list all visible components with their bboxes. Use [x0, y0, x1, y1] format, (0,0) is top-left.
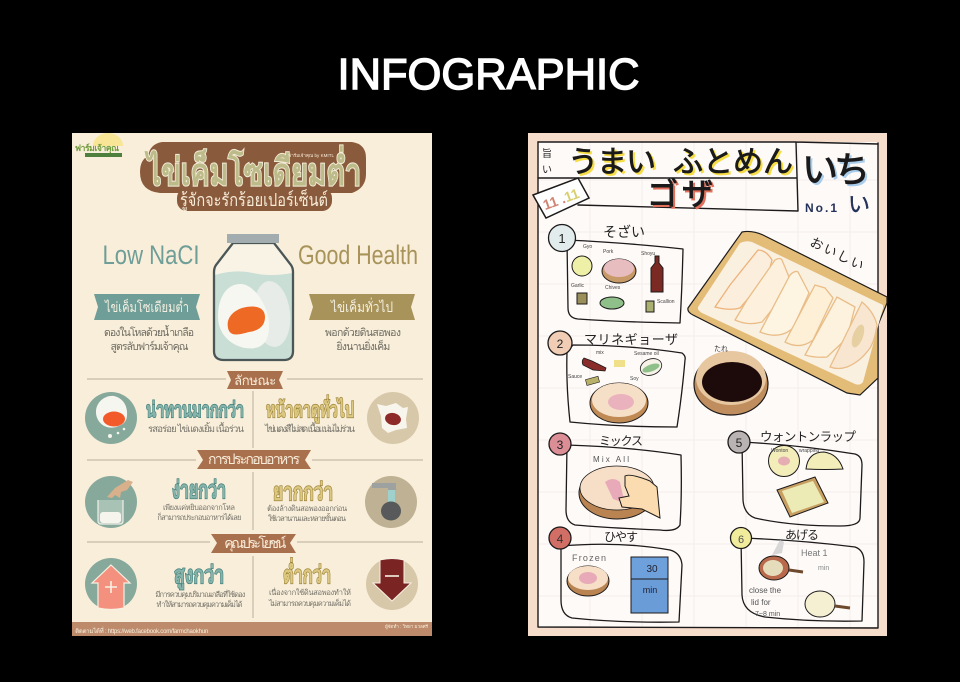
step 4 chill: 4	[557, 532, 564, 546]
text: lower: ไม่สามารถควบคุมความเค็มได้	[268, 598, 351, 608]
step 2 marinate: マリネギョーザ	[584, 329, 678, 348]
step 6 fry	[730, 526, 864, 621]
text: ordinary look: ไข่แดงสีไม่สด เนื้อแน่นไม่ร่วน	[264, 422, 356, 435]
step 6 fry: close the	[749, 586, 782, 595]
icon: tap and egg circle	[365, 476, 417, 528]
text: tastier	[146, 399, 244, 435]
logo	[75, 133, 123, 157]
step 6 fry: Heat 1	[801, 548, 828, 558]
label: delicious: おいしい	[807, 232, 868, 274]
recipe title: ふとめん	[675, 148, 795, 181]
footer bar: ผู้จัดทำ : วิทยา มวลศรี	[385, 623, 429, 630]
main title: INFOGRAPHIC	[338, 50, 640, 99]
section banner: cooking: การประกอบอาหาร	[208, 451, 300, 467]
recipe title: うまい	[570, 148, 658, 181]
step 1 ingredients: Chives	[605, 285, 621, 291]
sauce dish	[694, 344, 768, 415]
step 1 ingredients: Gyo	[583, 244, 592, 250]
panel: low sodium salted egg poster	[72, 133, 432, 636]
step 1 ingredients: Scallion	[657, 299, 675, 305]
step 1 ingredients	[548, 222, 683, 323]
step 2 marinate: mix	[596, 350, 604, 356]
ribbon: regular egg	[309, 294, 415, 320]
ribbon: low sodium egg	[94, 294, 200, 320]
step 3 mix	[549, 432, 681, 530]
step 5 wrap	[728, 426, 862, 526]
step 1 ingredients: そざい	[603, 222, 645, 242]
text: tastier: น่าทานมากกว่า	[146, 399, 244, 422]
text: low sodium description: ดองในโหลด้วยน้ำเกลือ	[104, 325, 194, 339]
poster title	[140, 142, 366, 211]
footer bar	[72, 622, 432, 636]
step 6 fry: 6	[738, 534, 744, 546]
gyoza dumplings	[715, 250, 877, 368]
text: regular description: พอกด้วยดินสอพอง	[325, 327, 401, 339]
heading: Low NaCl: Low NaCI	[102, 240, 200, 270]
poster title: รู้จักจะรักร้อยเปอร์เซ็นต์	[180, 188, 328, 211]
step 6 fry: lid for	[751, 598, 771, 607]
step 1 ingredients: Shoyu	[641, 251, 655, 257]
recipe title	[568, 146, 795, 181]
text: lower: ต่ำกว่า	[283, 557, 331, 589]
step 6 fry: 7~8 min	[755, 611, 780, 618]
logo: ฟาร์มเจ้าคุณ	[75, 143, 119, 154]
small label: tasty: 旨	[542, 145, 552, 160]
date tag	[533, 178, 589, 218]
jar with egg	[214, 234, 293, 360]
text: lower: เนื่องจากใช้ดินสอพองทำให้	[269, 587, 351, 597]
text: lower	[268, 557, 351, 608]
text: harder: ยากกว่า	[273, 479, 333, 506]
poster title: ฟาร์มเจ้าคุณ by KMITL	[288, 152, 334, 159]
text: easier	[157, 477, 241, 522]
step 4 chill: 30	[646, 564, 658, 575]
text: low sodium description: สูตรลับฟาร์มเจ้าคุณ	[110, 340, 189, 353]
ribbon: regular egg: ไข่เค็มทั่วไป	[330, 298, 393, 315]
icon: down arrow circle	[366, 558, 418, 610]
step 5 wrap: wrapping	[799, 448, 820, 454]
step 5 wrap: ウォントンラップ	[760, 426, 856, 445]
step 3 mix: ミックス	[599, 432, 643, 449]
step 2 marinate	[548, 329, 685, 427]
text: regular description: ยิ่งนานยิ่งเค็ม	[336, 339, 390, 353]
step 6 fry: min	[818, 565, 829, 572]
icon: dark yolk circle	[367, 392, 419, 444]
text: easier: ง่ายกว่า	[172, 477, 226, 504]
step 3 mix: 3	[557, 438, 564, 452]
step 4 chill: ひやす	[604, 528, 638, 545]
icon: egg yolk circle	[85, 392, 137, 444]
section banner: characteristics	[227, 371, 283, 389]
poster title: ไข่เค็มโซเดียมต่ำ	[144, 145, 361, 194]
rank text	[802, 149, 872, 217]
step 2 marinate: Sesame oil	[634, 351, 659, 357]
rank text: いち	[804, 151, 872, 192]
ribbon: low sodium egg: ไข่เค็มโซเดียมต่ำ	[104, 298, 189, 315]
section banner: cooking	[197, 450, 311, 469]
step 2 marinate: Sauce	[568, 374, 582, 380]
panel: gyoza recipe poster: い	[542, 161, 552, 176]
step 5 wrap: Wonton	[771, 448, 788, 454]
text: ordinary look: หน้าตาดูทั่วไป	[266, 394, 354, 424]
section banner: benefits: คุณประโยชน์	[224, 535, 287, 552]
text: harder	[267, 479, 347, 523]
step 1 ingredients: Pork	[603, 249, 614, 255]
rank text: い	[848, 192, 870, 217]
heading: Good Health: Good Health	[298, 240, 418, 270]
rank text: いち	[802, 149, 870, 190]
text: harder: ต้องล้างดินสอพองออกก่อน	[267, 504, 347, 513]
text: easier: เพียงแค่หยิบออกจากโหล	[163, 503, 235, 512]
gyoza tray	[688, 231, 887, 395]
text: higher: มีการควบคุมปริมาณเกลือที่ใช้ดอง	[155, 589, 246, 599]
text: easier: ก็สามารถประกอบอาหารได้เลย	[157, 512, 241, 522]
step 4 chill: Frozen	[572, 553, 606, 563]
recipe title: うまい	[568, 146, 656, 179]
icon: up arrow circle	[85, 558, 137, 610]
dish title: ゴザ	[649, 179, 715, 214]
step 6 fry: あげる	[785, 526, 819, 543]
step 3 mix: Mix All	[593, 455, 629, 464]
recipe title: ふとめん	[673, 146, 793, 179]
step 1 ingredients: 1	[558, 231, 566, 246]
date tag: 11 .11	[541, 185, 582, 213]
text: higher: ทำให้สามารถควบคุมความเค็มได้	[156, 599, 243, 609]
text: regular description	[325, 327, 401, 353]
step 2 marinate: Soy	[630, 376, 639, 382]
text: higher	[155, 562, 246, 609]
section banner: characteristics: ลักษณะ	[234, 373, 276, 388]
step 5 wrap: 5	[736, 436, 743, 450]
text: low sodium description	[104, 325, 194, 353]
panel: gyoza recipe poster	[528, 133, 887, 636]
step 2 marinate: 2	[557, 337, 564, 351]
sauce dish: たれ	[714, 344, 728, 354]
text: ordinary look	[264, 394, 356, 435]
text: higher: สูงกว่า	[174, 562, 224, 590]
dish title: ゴザ	[647, 177, 713, 212]
rank text: No.1	[805, 201, 837, 215]
header boxes	[538, 142, 878, 211]
step 4 chill	[549, 527, 682, 622]
section banner: benefits	[211, 534, 296, 553]
text: harder: ใช้เวลานานและหลายขั้นตอน	[268, 513, 346, 523]
icon: hand and jar circle	[85, 476, 137, 528]
step 1 ingredients: Garlic	[571, 283, 585, 289]
footer bar: ติดตามได้ที่ : https://web.facebook.com/farmchaokhun	[75, 627, 208, 635]
text: tastier: รสอร่อย ไข่แดงเยิ้ม เนื้อร่วน	[148, 422, 244, 435]
step 4 chill: min	[643, 585, 657, 595]
